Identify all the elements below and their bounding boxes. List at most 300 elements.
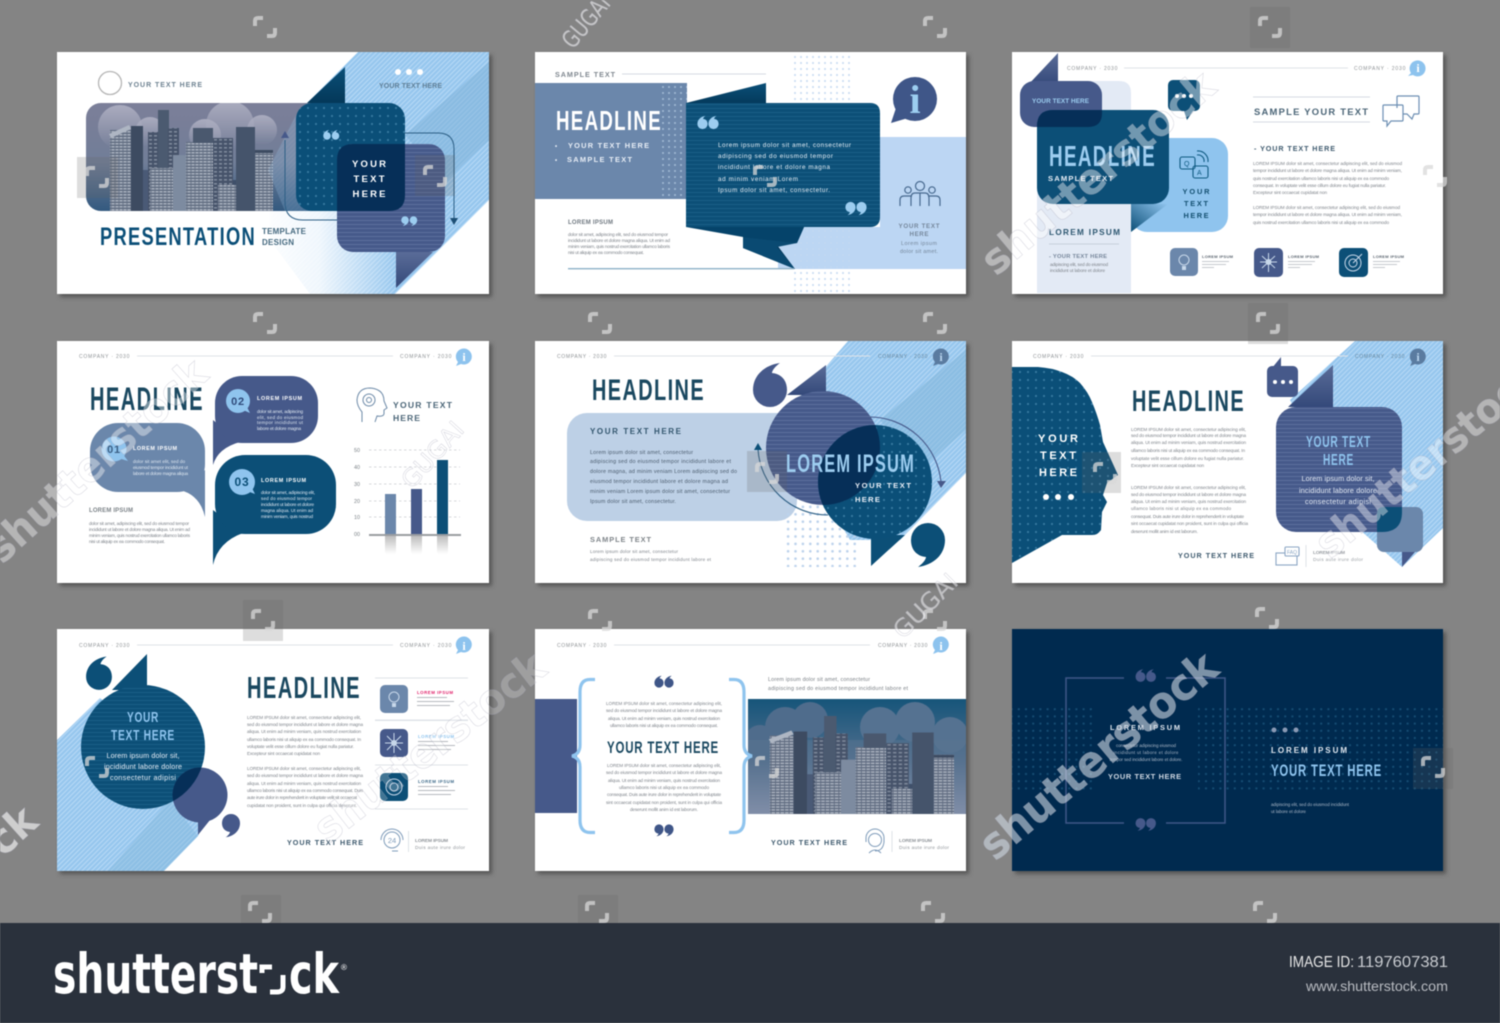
section heading: SAMPLE YOUR TEXT: [1254, 106, 1368, 117]
text block bottom: sint occaecat cupidatat non proident, sunt in culpa qui officia: [606, 800, 722, 805]
bar chart: [354, 448, 461, 554]
panel: slide 9 navy closing: [1012, 629, 1443, 871]
quote text: Lorem ipsum dolor sit amet, consectetur: [718, 142, 851, 149]
side text: YOUR TEXT: [898, 223, 940, 230]
body text: tempor incididunt ut labore et dolore magna aliqua. Ut enim ad minim veniam,: [1253, 212, 1402, 217]
bubble 03: magna aliqua. Ut enim ad: [261, 508, 313, 513]
bar chart: 40: [354, 465, 360, 471]
pale column text: incididunt ut labore et dolore: [1050, 268, 1105, 273]
text block two: ullamco laboris nisi ut aliquip ex ea commodo consequat. Duis: [247, 788, 364, 793]
header: [79, 637, 472, 654]
quote marks: [1136, 669, 1156, 831]
closing text: YOUR TEXT HERE: [1271, 761, 1382, 780]
folded ribbon: [686, 83, 804, 269]
frame text: YOUR TEXT HERE: [1108, 772, 1181, 781]
header: [1067, 60, 1426, 76]
side text: Lorem ipsum: [901, 241, 937, 247]
contact text: Duis aute irure dolor: [899, 845, 949, 851]
text block: minim veniam, quis nostrud exercitation ullamco laboris: [89, 533, 191, 538]
side text: [898, 223, 940, 255]
bubble 02: dolor sit amet, adipiscing: [257, 409, 303, 414]
icon: question and answer: A: [1197, 170, 1202, 177]
footer label: YOUR TEXT HERE: [1178, 551, 1254, 560]
intro text: adipiscing sed do eiusmod tempor incididunt labore et: [768, 686, 908, 692]
text block two: sed do eiusmod tempor incididunt ut labore et dolore magna: [247, 773, 363, 778]
bullet list: [555, 141, 649, 164]
icon: presentation chat: [1276, 547, 1299, 565]
text block two: sint occaecat cupidatat non proident, sunt in culpa qui officia: [1131, 521, 1248, 526]
header: i: [1416, 61, 1420, 75]
dot field: [785, 502, 859, 567]
text block one: sed do eiusmod tempor incididunt ut labore et dolore magna: [1131, 433, 1246, 438]
text block top: sed do eiusmod tempor incididunt ut labore et dolore magna: [606, 708, 722, 713]
circle text: YOUR: [127, 709, 159, 726]
header: i: [939, 350, 943, 364]
header: COMPANY · 2030: [79, 643, 130, 649]
icon: head with gear: [357, 388, 387, 422]
header: [1033, 349, 1426, 366]
card text: Lorem ipsum dolor sit amet, consectetur: [590, 450, 693, 456]
text block one: [1131, 427, 1246, 468]
body text: LOREM IPSUM dolor sit amet, consectetur adipiscing elit, sed do eiusmod: [1253, 205, 1400, 210]
section heading: [1253, 96, 1370, 122]
bubble 03: sed do eiusmod tempor: [261, 496, 312, 501]
contact text: Duis aute irure dolor: [415, 845, 465, 851]
closing text: ut labore et dolore: [1271, 809, 1307, 814]
panel: slide 8 bracket quote with city: [535, 629, 968, 871]
bar chart: 10: [354, 515, 360, 521]
circle text: TEXT HERE: [111, 727, 175, 744]
icon: people: [900, 182, 940, 206]
closing text: LOREM IPSUM: [1271, 746, 1347, 755]
panel: slide 2 folded quote: [535, 52, 966, 294]
bubble text: consectetur adipisi: [1305, 497, 1371, 506]
quote text: adipiscing sed do eiusmod tempor: [718, 153, 833, 160]
contact text: [899, 838, 949, 851]
panel: slide 1 presentation cover: [57, 52, 489, 294]
text block two: aliqua. Ut enim ad minim veniam, quis nostrud exercitation: [247, 781, 361, 786]
right icon list: LOREM IPSUM: [417, 690, 453, 695]
card text: minim veniam Lorem ipsum dolor sit amet, consectetur: [590, 489, 730, 495]
striped bubble: [1276, 365, 1402, 532]
text block one: aliqua. Ut enim ad minim veniam, quis nostrud exercitation: [247, 729, 361, 734]
card text: [590, 427, 737, 505]
bubble 01: [90, 423, 205, 517]
chart heading: YOUR TEXT: [393, 400, 453, 410]
icon: headset: [866, 829, 884, 853]
text block two: cupidatat non proident, sunt in culpa qui officia deserunt.: [247, 803, 357, 808]
head silhouette: TEXT: [1040, 450, 1076, 462]
circle title: HERE: [855, 495, 880, 504]
text block two: ullamco laboris nisi ut aliquip ex ea commodo: [1131, 506, 1231, 511]
card text: Ipsum dolor sit amet, consectetur.: [590, 499, 676, 505]
headline: HEADLINE: [1049, 141, 1156, 173]
light blue block: [778, 137, 966, 269]
indigo bubble: YOUR TEXT HERE: [1032, 98, 1090, 105]
picture: city skyline: [745, 699, 968, 814]
card text: dolore magna, ad minim veniam Lorem adipiscing sed do: [590, 469, 737, 475]
indigo block: [535, 699, 577, 813]
bubble text: Lorem ipsum dolor sit,: [1302, 474, 1374, 483]
shutterstock logo: ck: [289, 942, 340, 1006]
icon tiles: [1170, 248, 1368, 277]
text block one: ullamco laboris nisi ut aliquip ex ea commodo consequat. In: [247, 737, 361, 742]
contact text: Duis aute irure dolor: [1313, 557, 1363, 563]
text block two: consequat. Duis aute irure dolor in reprehenderit in voluptate: [1131, 514, 1244, 519]
text block one: aliqua. Ut enim ad minim veniam, quis nostrud exercitation: [1131, 440, 1246, 445]
lower text block: [568, 220, 671, 255]
pale text card: [567, 413, 797, 521]
light blue bubble: [1131, 138, 1228, 232]
header: i: [1416, 350, 1420, 364]
text block bottom: ullamco laboris nisi ut aliquip ex ea commodo: [619, 785, 709, 790]
text block bottom: sed do eiusmod tempor incididunt ut labore et dolore magna: [606, 770, 722, 775]
header: i: [939, 639, 943, 653]
shutterstock logo: ®: [341, 963, 347, 972]
text block bottom: deserunt mollit anim id est laborum.: [630, 807, 698, 812]
circle title: YOUR TEXT: [855, 481, 911, 490]
indigo circle: [172, 768, 228, 835]
bar chart: 00: [354, 532, 360, 538]
quote marks: [697, 116, 867, 215]
text block one: sed do eiusmod tempor incididunt ut labore et dolore magna: [247, 722, 363, 727]
bubble 02: LOREM IPSUM: [257, 396, 302, 402]
quote marks: [323, 130, 417, 226]
side text: HERE: [910, 231, 928, 238]
closing text: adipiscing elit, sed do eiusmod incididunt: [1271, 802, 1350, 807]
watermark words: shutterstock: [971, 60, 1225, 285]
dot band: [1012, 708, 1443, 793]
sample label with rule: SAMPLE TEXT: [555, 70, 616, 79]
header: i: [462, 350, 466, 364]
quote text: incididunt labore et dolore magna: [718, 164, 830, 171]
frame text: LOREM IPSUM: [1110, 723, 1180, 732]
icon: presentation chat: FAQ: [1287, 550, 1297, 556]
curly brackets: [572, 680, 752, 832]
panel: slide 7 big circle: [57, 629, 489, 871]
teal bubble: [1037, 110, 1169, 204]
title: TEMPLATE: [262, 227, 307, 236]
watermark words: GUGAI: [396, 416, 470, 494]
three dots and label: YOUR TEXT HERE: [379, 83, 442, 90]
pale column text: adipiscing elit, sed do eiusmod: [1050, 262, 1108, 267]
bubble label: HERE: [1184, 211, 1209, 220]
headline: HEADLINE: [1132, 385, 1245, 418]
headline: HEADLINE: [247, 670, 361, 705]
bullet list: SAMPLE TEXT: [567, 155, 632, 164]
sample text: adipiscing sed do eiusmod tempor incididunt labore et: [590, 557, 712, 562]
center heading: YOUR TEXT HERE: [607, 738, 719, 757]
text block two: sed do eiusmod tempor incididunt ut labore et dolore magna: [1131, 492, 1246, 497]
small bubble: [1377, 507, 1423, 567]
circle text: consectetur adipisi: [110, 773, 176, 782]
icon: 24 hour support: 24: [388, 836, 396, 845]
bubble 01: eiusmod tempor incididunt ut: [133, 465, 189, 470]
sample text: Lorem ipsum dolor sit amet, consectetur: [590, 549, 678, 554]
bubble 02: elit, sed do eiusmod: [257, 415, 303, 420]
pale column: [1037, 81, 1131, 293]
indigo bubble: [1020, 53, 1102, 127]
contact text: [415, 838, 465, 851]
text block two: aliqua. Ut enim ad minim veniam, quis nostrud exercitation: [1131, 499, 1246, 504]
title: PRESENTATION: [100, 223, 256, 251]
bubble label: TEXT: [354, 174, 385, 185]
icon: info bubble: i: [909, 77, 921, 122]
bubble 02: [213, 376, 318, 465]
header: COMPANY · 2030: [400, 354, 452, 360]
body text: [1253, 144, 1402, 225]
lower text block: dolor sit amet, adipiscing elit, sed do eiusmod tempor: [568, 232, 668, 237]
text block two: [1131, 485, 1248, 534]
headline: HEADLINE: [556, 105, 662, 136]
body text: quis nostrud exercitation ullamco laboris nisi ut aliquip ex ea commodo: [1253, 176, 1389, 181]
body text: consequat. In voluptate velit esse cillum dolore eu fugiat nulla pariatur.: [1253, 183, 1386, 188]
card text: eiusmod tempor incididunt labore et dolore magna ad: [590, 479, 728, 485]
headline: HEADLINE: [90, 381, 204, 417]
text block top: aliqua. Ut enim ad minim veniam, quis nostrud exercitation: [608, 716, 720, 721]
text block one: LOREM IPSUM dolor sit amet, consectetur adipiscing elit,: [1131, 427, 1246, 432]
image id: 1197607381: [1357, 954, 1448, 971]
closing text: [1271, 746, 1382, 814]
blue headline band: [535, 83, 687, 199]
title: DESIGN: [262, 238, 294, 247]
text block bottom: [606, 763, 722, 812]
footer bar: [0, 923, 1500, 1023]
header: COMPANY · 2030: [79, 354, 130, 360]
lower text block: minim veniam, quis nostrud exercitation ullamco laboris: [568, 244, 671, 249]
head silhouette: YOUR: [1038, 433, 1078, 445]
right icon list: LOREM IPSUM: [418, 779, 454, 784]
text block two: [247, 766, 364, 808]
bubble 03: dolor sit amet, adipiscing elit,: [261, 490, 315, 495]
right icon list: LOREM IPSUM: [418, 734, 454, 739]
text block one: [247, 715, 363, 756]
header: COMPANY · 2030: [878, 354, 928, 360]
picture: city skyline: [86, 101, 337, 211]
bubble 02: 02: [231, 396, 245, 408]
quote box: [686, 103, 880, 227]
bubble label: YOUR: [1182, 187, 1210, 196]
circle text: Lorem ipsum dolor sit,: [106, 751, 180, 760]
watermark words: GUGAI: [887, 568, 964, 644]
frame text: incididunt ut labore et dolore: [1114, 750, 1179, 755]
bubble 03: incididunt ut labore et dolore: [261, 502, 314, 507]
text block one: voluptate velit esse cillum dolore eu fugiat nulla pariatur.: [1131, 456, 1244, 461]
bar chart: 30: [354, 482, 360, 488]
header: COMPANY · 2030: [1033, 354, 1084, 360]
card text: YOUR TEXT HERE: [590, 427, 682, 436]
image id: [1289, 954, 1448, 971]
header: [557, 349, 949, 366]
icon: question and answer: Q: [1184, 161, 1190, 168]
text block top: ullamco laboris nisi ut aliquip ex ea commodo consequat.: [610, 723, 718, 728]
watermark words: shutterstock: [969, 641, 1229, 870]
icon: chat outline: [1383, 96, 1419, 126]
text block: nisi ut aliquip ex ea commodo consequat.: [89, 539, 165, 544]
body text: tempor incididunt ut labore et dolore magna aliqua. Ut enim ad minim veniam,: [1253, 168, 1402, 173]
arrows around bubbles: [281, 131, 458, 225]
panel: slide 5 lorem ipsum circles: [535, 341, 966, 583]
bubble 02: tempor incididunt ut: [257, 420, 304, 425]
comma quote bottom: [222, 814, 240, 837]
footer label: YOUR TEXT HERE: [287, 838, 363, 847]
panel: slide 4 numbered bubbles and chart: [57, 341, 489, 583]
icon captions: [1202, 254, 1405, 268]
text block: dolor sit amet, adipiscing elit, sed do eiusmod tempor: [89, 521, 189, 526]
indigo circle: [766, 365, 880, 505]
header: i: [462, 639, 466, 653]
watermark words: shutterstock: [304, 641, 556, 853]
text block top: LOREM IPSUM dolor sit amet, consectetur adipiscing elit,: [606, 701, 722, 706]
frame: [1066, 678, 1225, 823]
icon captions: LOREM IPSUM: [1373, 254, 1405, 259]
teal dotted bubble: [296, 67, 405, 211]
logo circle and label: YOUR TEXT HERE: [128, 82, 202, 89]
contact text: LOREM IPSUM: [899, 838, 932, 844]
bubble 01: LOREM IPSUM: [133, 446, 178, 452]
frame text: [1108, 723, 1182, 781]
icon captions: LOREM IPSUM: [1288, 254, 1320, 259]
circle title: [786, 450, 915, 504]
headline: [1048, 141, 1156, 183]
bubble 01: dolor sit amet elit, sed do: [133, 459, 185, 464]
bubble text: YOUR TEXT: [1306, 434, 1371, 451]
quote text: ad minim veniam Lorem: [718, 176, 798, 183]
body text: - YOUR TEXT HERE: [1254, 144, 1335, 153]
header: COMPANY · 2030: [557, 354, 607, 360]
teal circle: [818, 425, 932, 566]
text block one: voluptate velit esse cillum dolore eu fugiat nulla pariatur.: [247, 744, 354, 749]
bubble 03: minim veniam, quis nostrud: [261, 514, 313, 519]
text block two: LOREM IPSUM dolor sit amet, consectetur adipiscing elit,: [247, 766, 361, 771]
website: www.shutterstock.com: [1305, 978, 1448, 994]
bullet list: •: [555, 158, 557, 164]
headline: SAMPLE TEXT: [1048, 174, 1113, 183]
image id: IMAGE ID:: [1289, 954, 1354, 971]
text block two: LOREM IPSUM dolor sit amet, consectetur adipiscing elit,: [1131, 485, 1246, 490]
panel: slide 3 overlapping bubbles: [1012, 52, 1443, 294]
dot column: [792, 53, 853, 293]
icon: chat dots: [1267, 357, 1298, 397]
text block one: ullamco laboris nisi ut aliquip ex ea commodo consequat. In: [1131, 448, 1245, 453]
bubble text: [1299, 434, 1377, 506]
icon: question and answer: [1180, 151, 1208, 178]
sample text: SAMPLE TEXT: [590, 535, 651, 544]
text block one: Excepteur sint occaecat cupidatat non: [1131, 463, 1204, 468]
comma quote top: [753, 363, 787, 407]
bubble text: incididunt labore dolore: [1299, 486, 1377, 495]
icon: 24 hour support: [381, 829, 403, 851]
icon: info bubble: [891, 77, 937, 123]
bubble 03: 03: [234, 475, 250, 489]
frame text: tempor sed incididunt labore et dolore.: [1110, 757, 1182, 762]
bubble 01: 01: [107, 444, 121, 456]
comma quote bottom: [911, 523, 945, 567]
body text: quis nostrud exercitation ullamco laboris nisi ut aliquip ex ea commodo: [1253, 220, 1389, 225]
text block: incididunt ut labore et dolore magna aliqua. Ut enim ad: [89, 527, 190, 532]
three dots: [1272, 728, 1298, 732]
comma quote top: [86, 656, 112, 690]
text block bottom: aliqua. Ut enim ad minim veniam, quis nostrud exercitation: [608, 778, 720, 783]
contact text: LOREM IPSUM: [415, 838, 448, 844]
lower text block: LOREM IPSUM: [568, 220, 613, 226]
chart heading: HERE: [393, 413, 420, 423]
header: COMPANY · 2030: [557, 643, 607, 649]
pale column text: - YOUR TEXT HERE: [1049, 254, 1107, 260]
bubble 02: labore et dolore magna: [257, 426, 301, 431]
header: COMPANY · 2030: [1354, 66, 1406, 72]
lower text block: incididunt ut labore et dolore magna aliqua. Ut enim ad: [568, 238, 670, 243]
logo circle and label: [98, 72, 202, 94]
bubble 01: labore et dolore magna aliqua: [133, 471, 188, 476]
bubble label: HERE: [352, 189, 386, 200]
quote text: [718, 142, 851, 194]
bullet list: •: [555, 144, 557, 150]
text block: [89, 508, 191, 544]
bar chart: 20: [354, 499, 360, 505]
header: COMPANY · 2030: [1067, 66, 1118, 72]
sample text: [590, 535, 712, 562]
panel: slide 6 head silhouette: [1012, 341, 1443, 583]
right icon list: [375, 678, 468, 810]
header: [79, 349, 472, 366]
intro text: [768, 677, 908, 692]
text block one: LOREM IPSUM dolor sit amet, consectetur adipiscing elit,: [247, 715, 361, 720]
header: [557, 637, 949, 654]
three dots and label: [379, 69, 442, 90]
head silhouette: [1012, 367, 1118, 563]
bubble label: TEXT: [1184, 199, 1208, 208]
arcs with arrows: [754, 417, 946, 515]
circle title: LOREM IPSUM: [786, 450, 915, 478]
footer label: YOUR TEXT HERE: [771, 838, 847, 847]
header: COMPANY · 2030: [1355, 354, 1405, 360]
card text: adipiscing sed do eiusmod tempor incididunt labore et: [590, 459, 732, 465]
circle text: [104, 709, 182, 782]
indigo striped bubble: [337, 144, 445, 288]
text block one: Excepteur sint occaecat cupidatat non: [247, 751, 320, 756]
contact text: LOREM IPSUM: [1313, 550, 1345, 556]
shutterstock logo: shutterst: [53, 942, 258, 1006]
header: COMPANY · 2030: [400, 643, 452, 649]
frame text: consectetur adipiscing eiusmod: [1116, 743, 1177, 748]
side text: dolor sit amet.: [900, 249, 938, 255]
icon captions: LOREM IPSUM: [1202, 254, 1234, 259]
contact text: [1313, 550, 1363, 563]
pale column text: [1049, 228, 1120, 273]
bubble label: [1182, 187, 1210, 220]
bubble label: YOUR: [352, 159, 386, 170]
bullet list: YOUR TEXT HERE: [568, 141, 649, 150]
lower text block: nisi ut aliquip ex ea commodo consequat.: [568, 250, 644, 255]
header: COMPANY · 2030: [878, 643, 928, 649]
bubble 03: LOREM IPSUM: [261, 478, 306, 484]
bubble text: HERE: [1323, 452, 1354, 469]
bar chart: 50: [354, 448, 360, 454]
teal circle: [81, 654, 205, 809]
text block two: deserunt mollit anim id est laborum.: [1131, 529, 1198, 534]
bubble label: [352, 159, 386, 200]
quote text: Ipsum dolor sit amet, consectetur.: [718, 187, 830, 194]
text block two: aute irure dolor in reprehenderit in voluptate velit sit occaecat: [247, 795, 358, 800]
body text: Excepteur sint occaecat cupidatat non: [1253, 190, 1327, 195]
text block: LOREM IPSUM: [89, 508, 133, 514]
icon: small chat bubble: [1168, 80, 1200, 120]
bubble 03: [213, 455, 336, 565]
text block bottom: LOREM IPSUM dolor sit amet, consectetur adipiscing elit,: [607, 763, 721, 768]
text block bottom: consequat. Duis aute irure dolor in reprehenderit in voluptate: [607, 792, 721, 797]
headline: HEADLINE: [592, 374, 705, 407]
